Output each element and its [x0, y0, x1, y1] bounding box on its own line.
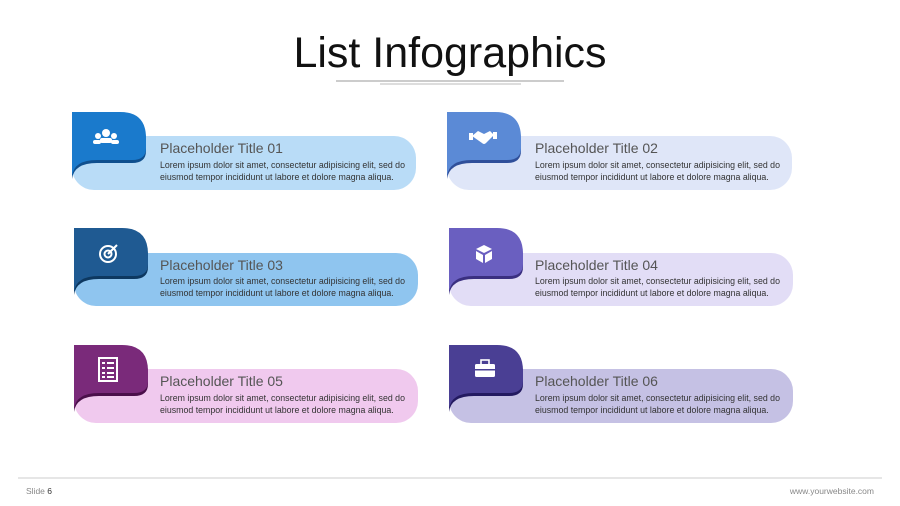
card 01: [72, 112, 416, 190]
card 01: Placeholder Title 01: [160, 140, 283, 156]
card 01: eiusmod tempor incididunt ut labore et dolore magna aliqua.: [160, 172, 394, 182]
icon: team: [93, 129, 119, 144]
card 05: Placeholder Title 05: [160, 373, 283, 389]
card 06: [449, 345, 793, 423]
card 03: eiusmod tempor incididunt ut labore et dolore magna aliqua.: [160, 288, 394, 298]
card 02: eiusmod tempor incididunt ut labore et dolore magna aliqua.: [535, 172, 769, 182]
card 05: [74, 345, 418, 423]
card 05: Lorem ipsum dolor sit amet, consectetur adipisicing elit, sed do: [160, 393, 405, 403]
card 03: Lorem ipsum dolor sit amet, consectetur adipisicing elit, sed do: [160, 276, 405, 286]
card 03: Placeholder Title 03: [160, 257, 283, 273]
card 06: eiusmod tempor incididunt ut labore et dolore magna aliqua.: [535, 405, 769, 415]
card 04: [449, 228, 793, 306]
footer: www.yourwebsite.com: [789, 486, 874, 496]
card 05: eiusmod tempor incididunt ut labore et dolore magna aliqua.: [160, 405, 394, 415]
icon: briefcase: [475, 360, 495, 377]
card 01: Lorem ipsum dolor sit amet, consectetur adipisicing elit, sed do: [160, 160, 405, 170]
card 06: Placeholder Title 06: [535, 373, 658, 389]
card 02: [447, 112, 792, 190]
card 04: Lorem ipsum dolor sit amet, consectetur adipisicing elit, sed do: [535, 276, 780, 286]
icon: checklist: [99, 358, 117, 381]
card 06: Lorem ipsum dolor sit amet, consectetur adipisicing elit, sed do: [535, 393, 780, 403]
footer: Slide 6: [26, 486, 52, 496]
icon: box: [476, 245, 492, 263]
card 02: Lorem ipsum dolor sit amet, consectetur adipisicing elit, sed do: [535, 160, 780, 170]
icon: target: [100, 245, 117, 262]
card 04: Placeholder Title 04: [535, 257, 658, 273]
card 03: [74, 228, 418, 306]
footer: [18, 478, 882, 496]
title: List Infographics: [293, 29, 607, 77]
card 04: eiusmod tempor incididunt ut labore et dolore magna aliqua.: [535, 288, 769, 298]
card 02: Placeholder Title 02: [535, 140, 658, 156]
icon: handshake: [469, 131, 497, 144]
